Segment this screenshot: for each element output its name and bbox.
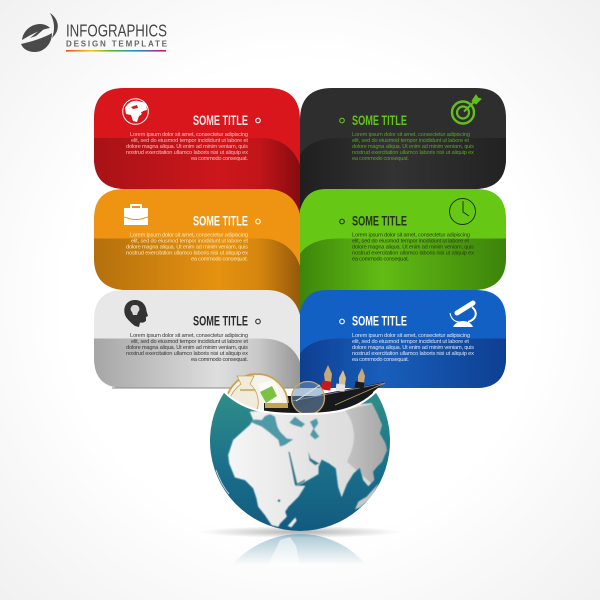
text block: elit, sed do eiusmod tempor incididunt ut labore et	[352, 339, 469, 345]
panel: red	[94, 88, 300, 226]
pens	[321, 365, 365, 392]
text block: dolore magna aliqua. Ut enim ad minim veniam, quis	[352, 244, 474, 250]
text block: elit, sed do eiusmod tempor incididunt ut labore et	[131, 238, 248, 244]
panel: orange	[94, 189, 300, 326]
title: SOME TITLE	[352, 112, 407, 128]
text block: Lorem ipsum dolor sit amet, consectetur adipiscing	[352, 132, 470, 138]
black sea	[289, 417, 305, 427]
edge highlight	[216, 470, 229, 494]
text block: dolore magna aliqua. Ut enim ad minim veniam, quis	[126, 345, 248, 351]
title: SOME TITLE	[193, 312, 248, 328]
caspian sea	[310, 418, 319, 439]
red sea	[288, 452, 305, 486]
panel: grey	[94, 290, 300, 388]
sphere	[210, 392, 390, 531]
icon: head with lightbulb	[124, 300, 148, 327]
text block: nostrud exercitation ullamco laboris nisi ut aliquip ex	[352, 250, 474, 256]
rim	[224, 392, 376, 414]
logo rainbow rule	[66, 50, 166, 52]
marker	[340, 219, 344, 224]
text block: nostrud exercitation ullamco laboris nisi ut aliquip ex	[126, 150, 248, 156]
persian gulf	[308, 452, 319, 465]
title: SOME TITLE	[193, 112, 248, 128]
madagascar	[288, 517, 297, 527]
marker	[340, 118, 344, 123]
icon: target	[452, 95, 481, 124]
text block: Lorem ipsum dolor sit amet, consectetur adipiscing	[352, 333, 470, 339]
text block: nostrud exercitation ullamco laboris nisi ut aliquip ex	[352, 150, 474, 156]
title: SOME TITLE	[352, 312, 407, 328]
icon: briefcase	[124, 204, 148, 225]
text block: nostrud exercitation ullamco laboris nisi ut aliquip ex	[126, 351, 248, 357]
icon: microscope	[450, 303, 476, 327]
panel: blue	[300, 290, 506, 388]
mediterranean sea	[250, 414, 293, 447]
south-east asia islands	[355, 483, 379, 509]
text block: nostrud exercitation ullamco laboris nisi ut aliquip ex	[126, 250, 248, 256]
text block	[126, 333, 248, 363]
landmass	[228, 403, 387, 527]
lake	[278, 499, 280, 502]
title: SOME TITLE	[352, 212, 407, 228]
interior shadow	[288, 396, 378, 413]
text block	[352, 333, 474, 363]
marker	[256, 319, 260, 324]
text block: nostrud exercitation ullamco laboris nisi ut aliquip ex	[352, 351, 474, 357]
logo subtitle: DESIGN TEMPLATE	[66, 40, 168, 48]
text block: elit, sed do eiusmod tempor incididunt ut labore et	[352, 138, 469, 144]
text block: ea commodo consequat.	[191, 156, 248, 162]
text block: Lorem ipsum dolor sit amet, consectetur adipiscing	[352, 232, 470, 238]
globe reflection and shadow	[200, 526, 400, 565]
icon: clock	[450, 198, 476, 224]
clock and money bag	[227, 373, 289, 411]
text block: ea commodo consequat.	[191, 256, 248, 262]
text block: dolore magna aliqua. Ut enim ad minim veniam, quis	[352, 345, 474, 351]
marker	[340, 319, 344, 324]
text block: ea commodo consequat.	[191, 357, 248, 363]
text block: Lorem ipsum dolor sit amet, consectetur adipiscing	[130, 232, 248, 238]
logo title: INFOGRAPHICS	[66, 20, 167, 40]
text block: elit, sed do eiusmod tempor incididunt ut labore et	[352, 238, 469, 244]
globe contents	[227, 365, 386, 413]
logo mark	[21, 13, 58, 52]
marker	[256, 219, 260, 224]
text block: elit, sed do eiusmod tempor incididunt ut labore et	[131, 339, 248, 345]
shaded side of land	[346, 404, 387, 483]
magnifier	[292, 382, 324, 414]
text block: ea commodo consequat.	[352, 357, 409, 363]
text block: elit, sed do eiusmod tempor incididunt ut labore et	[131, 138, 248, 144]
text block	[126, 232, 248, 262]
globe	[210, 392, 390, 531]
icon: globe	[123, 99, 148, 124]
panel: dark	[300, 88, 506, 226]
text block	[126, 132, 248, 162]
text block: ea commodo consequat.	[352, 256, 409, 262]
title: SOME TITLE	[193, 212, 248, 228]
text block	[352, 132, 474, 162]
marker	[256, 118, 260, 123]
text block: dolore magna aliqua. Ut enim ad minim veniam, quis	[126, 144, 248, 150]
text block: dolore magna aliqua. Ut enim ad minim veniam, quis	[126, 244, 248, 250]
logo	[21, 13, 168, 52]
text block: Lorem ipsum dolor sit amet, consectetur adipiscing	[130, 132, 248, 138]
continents	[228, 400, 390, 527]
text block: Lorem ipsum dolor sit amet, consectetur adipiscing	[130, 333, 248, 339]
text block: dolore magna aliqua. Ut enim ad minim veniam, quis	[352, 144, 474, 150]
panel: green	[300, 189, 506, 326]
text block	[352, 232, 474, 262]
text block: ea commodo consequat.	[352, 156, 409, 162]
graduation cap	[292, 382, 386, 406]
